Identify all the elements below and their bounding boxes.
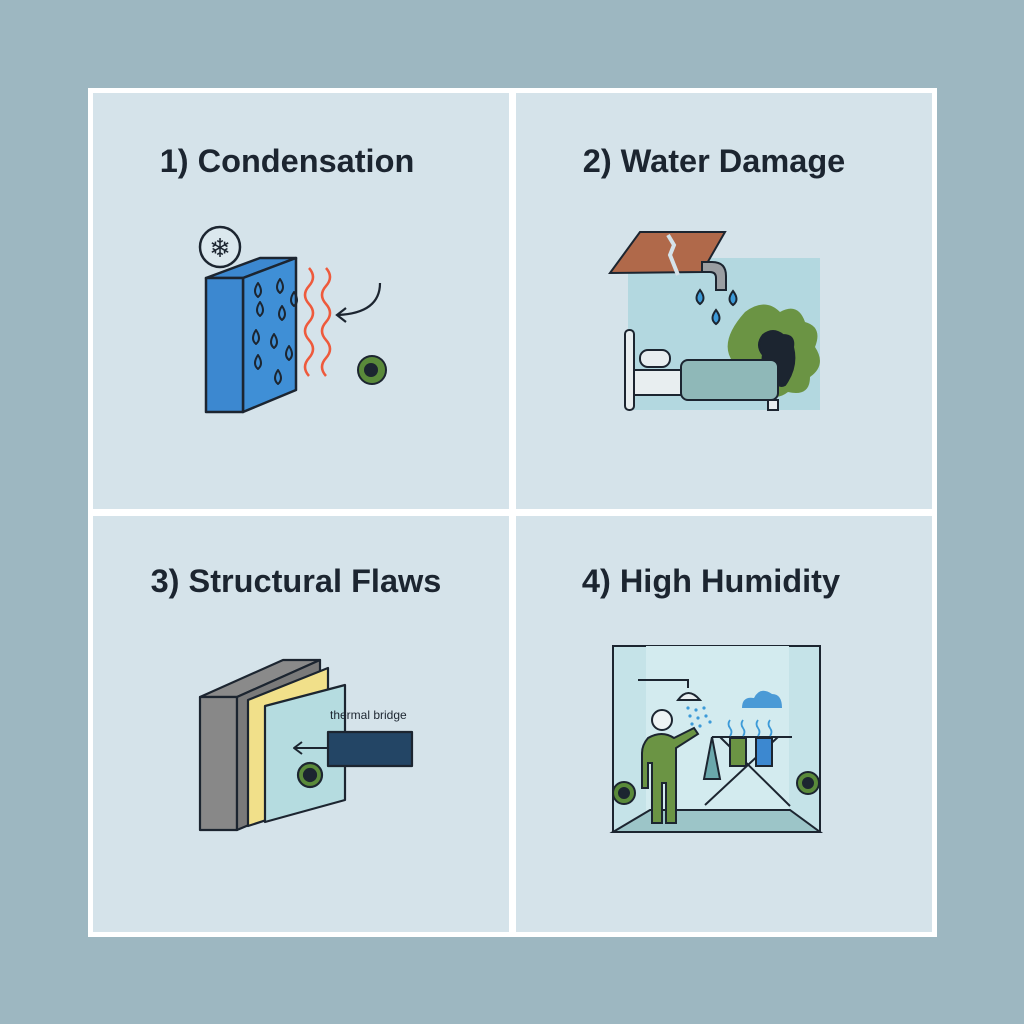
icon: room with leak	[610, 232, 820, 410]
icon: mold spot	[358, 356, 386, 384]
heading: condensation: 1) Condensation	[160, 143, 414, 179]
panel: high humidity	[582, 563, 840, 832]
icon: heat waves	[305, 268, 330, 376]
heading: water damage: 2) Water Damage	[583, 143, 845, 179]
arrow: warm air	[337, 283, 380, 322]
icon: cold wall with droplets	[200, 227, 297, 412]
label: thermal bridge: thermal bridge	[330, 708, 407, 722]
icon: wall layers with thermal bridge	[200, 660, 412, 830]
heading: structural flaws: 3) Structural Flaws	[151, 563, 441, 599]
icon: cold wall with droplets: ❄	[209, 233, 231, 263]
grid frame	[88, 88, 937, 937]
panel: water damage	[583, 143, 845, 410]
panel: structural flaws	[151, 563, 441, 830]
heading: high humidity: 4) High Humidity	[582, 563, 840, 599]
panel: condensation	[160, 143, 414, 412]
icon: humid bathroom scene	[613, 646, 820, 832]
